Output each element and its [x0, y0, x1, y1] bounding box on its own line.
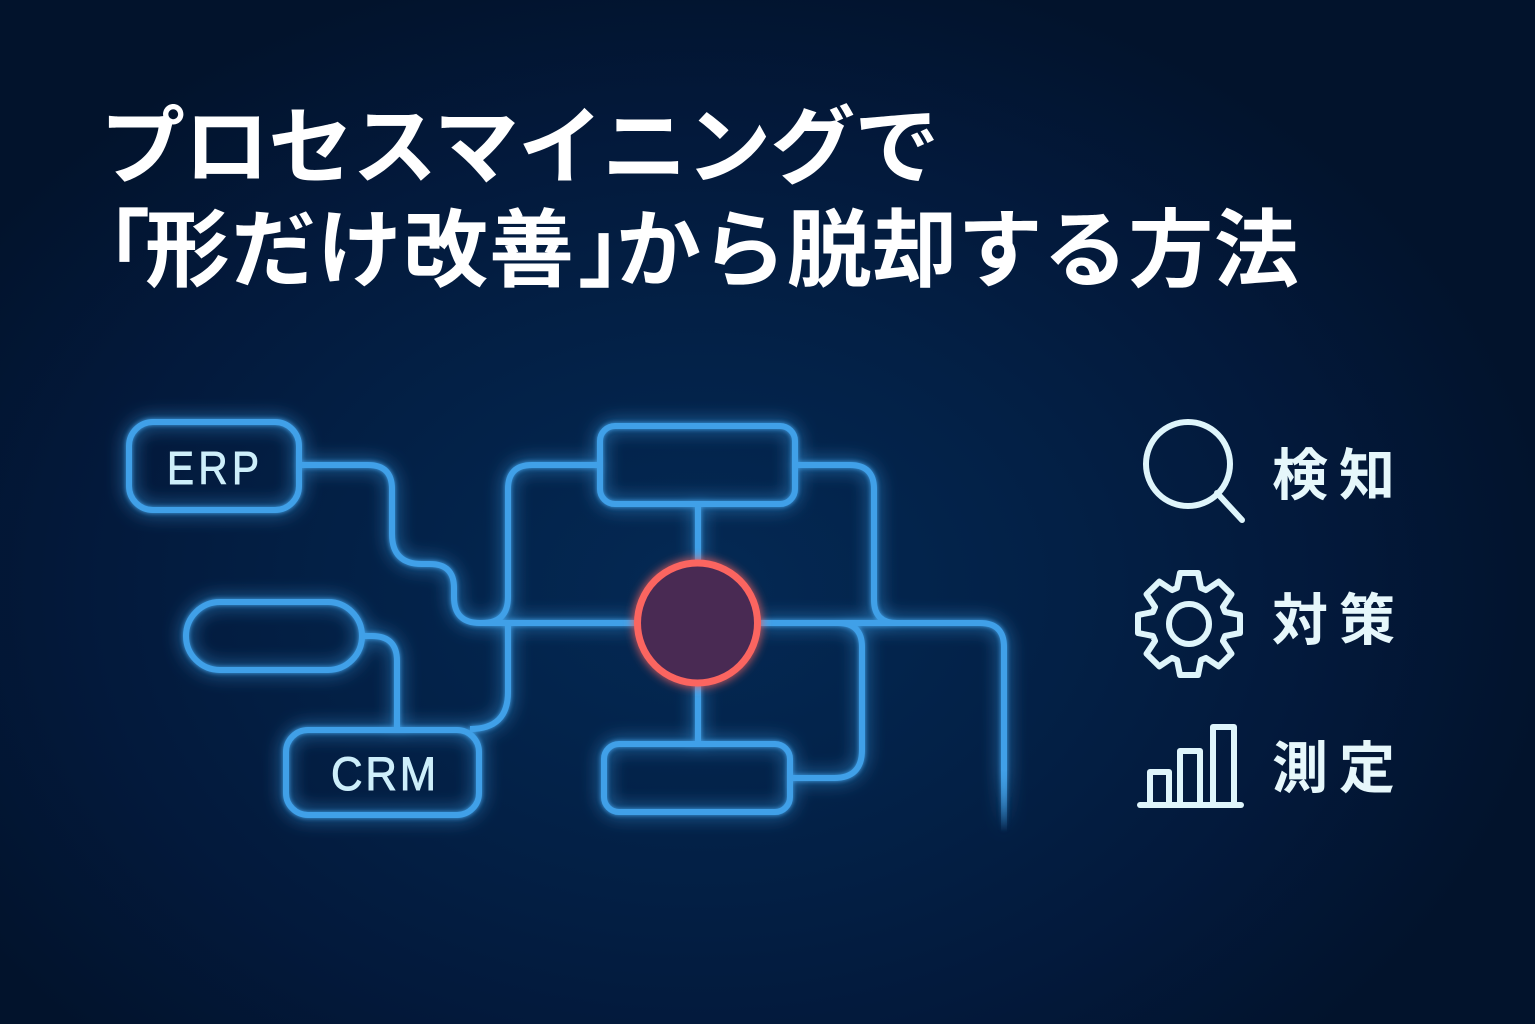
icon: bar chart: [1140, 727, 1241, 805]
connector: top box to left trunk: [482, 465, 600, 623]
title: 「: [65, 204, 150, 299]
label: countermeasure: 対策: [1272, 589, 1406, 652]
connector: top box to center: [695, 504, 701, 562]
connector: pill to CRM: [362, 636, 397, 730]
icon: gear: [1138, 573, 1240, 675]
label: detect: 検知: [1272, 444, 1406, 507]
title: プロセスマイニングで: [100, 101, 938, 196]
title: 形だけ改善: [145, 204, 575, 299]
node label: CRM: CRM: [331, 748, 439, 800]
node: pill: [186, 602, 362, 670]
title: [65, 101, 1299, 299]
node: top box: [600, 426, 795, 504]
icon: magnifier: [1146, 422, 1242, 520]
node label: ERP: ERP: [167, 444, 263, 495]
node: CRM: [286, 730, 479, 815]
connector: left trunk to CRM: [470, 623, 508, 729]
label: measure: 測定: [1272, 737, 1406, 800]
connector: center to bottom box right: [758, 623, 862, 778]
process flow diagram: [129, 422, 1004, 832]
connector: top box to right line: [795, 465, 897, 623]
connector: ERP to center: [299, 465, 636, 623]
node: bottom box: [604, 744, 790, 812]
connector: right exit line: [838, 623, 1004, 770]
title: 」: [578, 204, 663, 299]
title: から脱却する方法: [616, 204, 1299, 299]
center bottleneck node: [638, 563, 758, 683]
connector: fading end: [1001, 770, 1007, 832]
connector: center to bottom box: [695, 684, 701, 744]
node: ERP: [129, 422, 299, 510]
